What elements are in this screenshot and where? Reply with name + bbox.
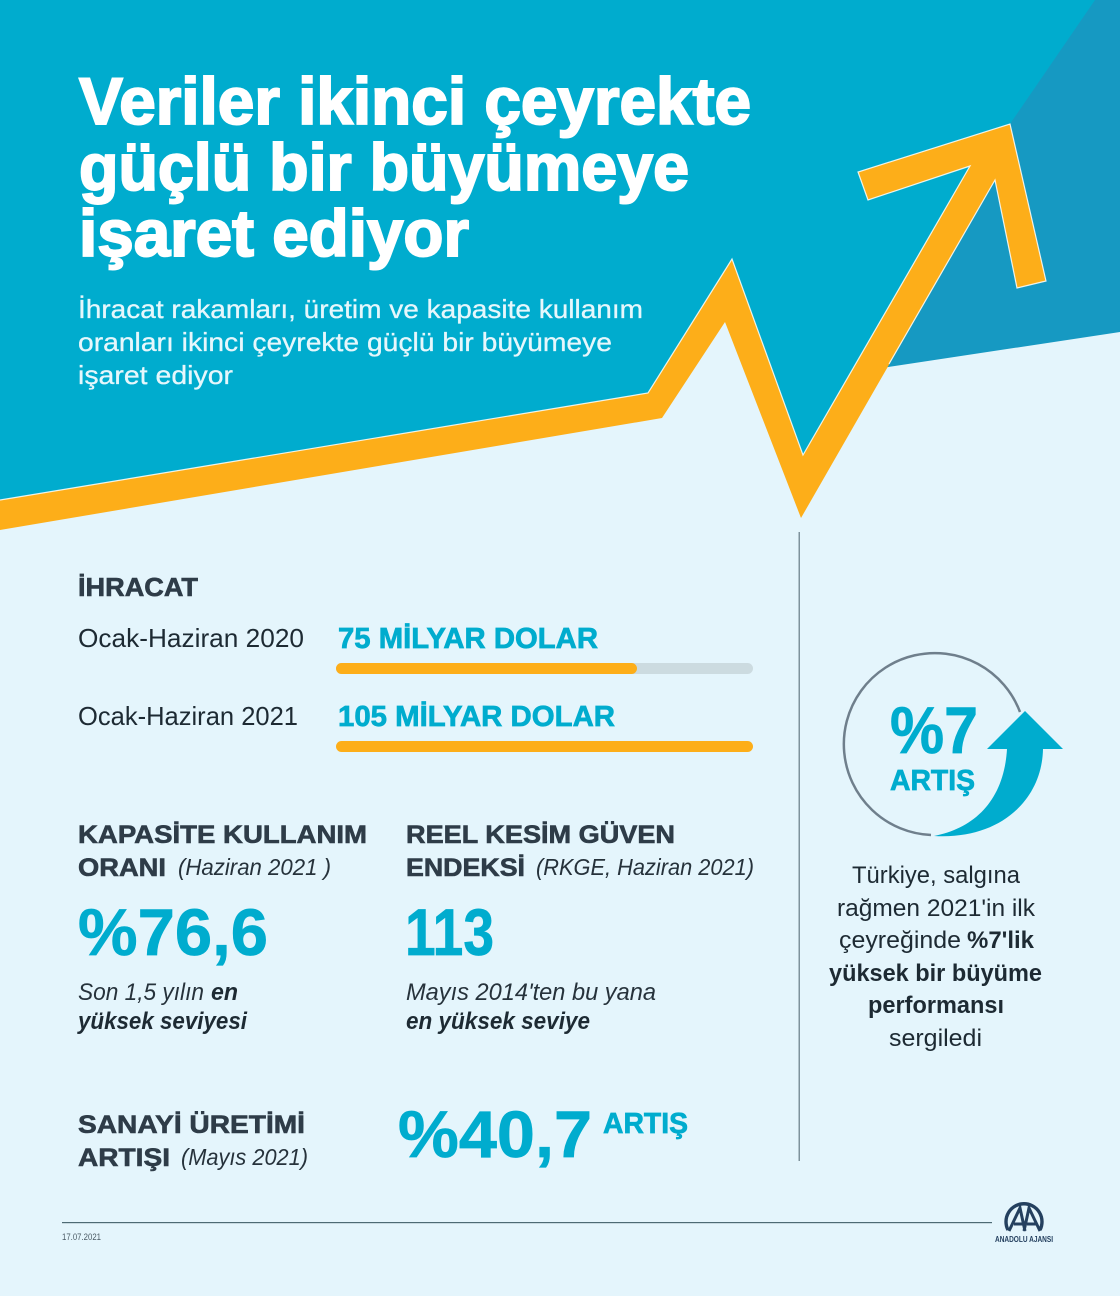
note: capacity: yüksek seviyesi	[77, 1008, 248, 1035]
heading: industrial production: ARTIŞI	[78, 1144, 170, 1172]
title: Veriler ikinci çeyrekte	[79, 64, 751, 138]
bar: 2020	[336, 663, 753, 674]
growth description	[829, 862, 1042, 1052]
value: industrial production: %40,7	[398, 1097, 592, 1171]
growth description: yüksek bir büyüme	[829, 960, 1042, 987]
note: capacity	[77, 979, 248, 1035]
subtitle: İhracat rakamları, üretim ve kapasite kullanım	[78, 294, 643, 324]
growth description: performansı	[868, 992, 1004, 1019]
heading: capacity: (Haziran 2021 )	[178, 854, 331, 880]
section: ihracat	[78, 574, 753, 752]
heading: confidence: REEL KESİM GÜVEN	[406, 820, 675, 849]
heading: confidence	[406, 820, 754, 882]
subtitle	[78, 294, 643, 390]
note: confidence: en yüksek seviye	[406, 1008, 590, 1035]
bar: 2021	[336, 741, 753, 752]
block: industrial production	[78, 1097, 688, 1172]
icon: curved growth arrow	[934, 711, 1063, 836]
badge value: %7	[890, 693, 978, 767]
footer rule	[62, 1222, 992, 1223]
note: capacity: en	[211, 979, 238, 1006]
heading: capacity: KAPASİTE KULLANIM	[78, 821, 367, 849]
heading: capacity	[78, 821, 367, 882]
header dark blue panel	[875, 0, 1120, 369]
logo: Anadolu Ajansi	[995, 1204, 1053, 1244]
heading: confidence: ENDEKSİ	[406, 854, 525, 882]
block: real sector confidence	[405, 820, 754, 1035]
value: confidence: 113	[405, 895, 494, 969]
heading: industrial production: SANAYİ ÜRETİMİ	[78, 1110, 305, 1139]
heading: confidence: (RKGE, Haziran 2021)	[536, 854, 754, 880]
title: güçlü bir büyümeye	[79, 130, 689, 204]
title	[79, 64, 751, 270]
title: işaret ediyor	[79, 196, 469, 270]
vertical divider	[798, 532, 800, 1161]
note: confidence: Mayıs 2014'ten bu yana	[406, 979, 656, 1006]
subtitle: işaret ediyor	[78, 360, 233, 390]
heading: industrial production	[78, 1110, 308, 1172]
growth description: sergiledi	[889, 1025, 982, 1052]
growth description: %7'lik	[967, 927, 1035, 954]
subtitle: oranları ikinci çeyrekte güçlü bir büyümeye	[78, 327, 612, 357]
heading: industrial production: (Mayıs 2021)	[181, 1144, 308, 1170]
block: capacity utilization	[77, 821, 367, 1035]
heading: ihracat: İHRACAT	[78, 574, 198, 602]
heading: capacity: ORANI	[78, 854, 166, 882]
value: 105 billion: 105 MİLYAR DOLAR	[338, 701, 615, 733]
rising orange arrow	[0, 124, 1046, 530]
header teal panel	[0, 0, 1120, 515]
label: 2021 period: Ocak-Haziran 2021	[78, 701, 298, 731]
growth description: rağmen 2021'in ilk	[837, 895, 1036, 922]
note: confidence	[406, 979, 656, 1035]
growth description: Türkiye, salgına	[852, 862, 1021, 889]
growth badge	[844, 653, 1063, 836]
growth description: çeyreğinde	[839, 927, 961, 954]
logo: Anadolu Ajansi: ANADOLU AJANSI	[995, 1234, 1053, 1244]
badge label: ARTIŞ	[890, 765, 975, 797]
value: 75 billion: 75 MİLYAR DOLAR	[338, 623, 598, 655]
label: 2020 period: Ocak-Haziran 2020	[78, 623, 304, 653]
value: capacity: %76,6	[78, 895, 268, 969]
note: capacity: Son 1,5 yılın	[78, 979, 204, 1006]
date: 17.07.2021	[62, 1232, 101, 1243]
circle outline	[844, 653, 1020, 835]
value suffix: artis: ARTIŞ	[603, 1108, 688, 1140]
